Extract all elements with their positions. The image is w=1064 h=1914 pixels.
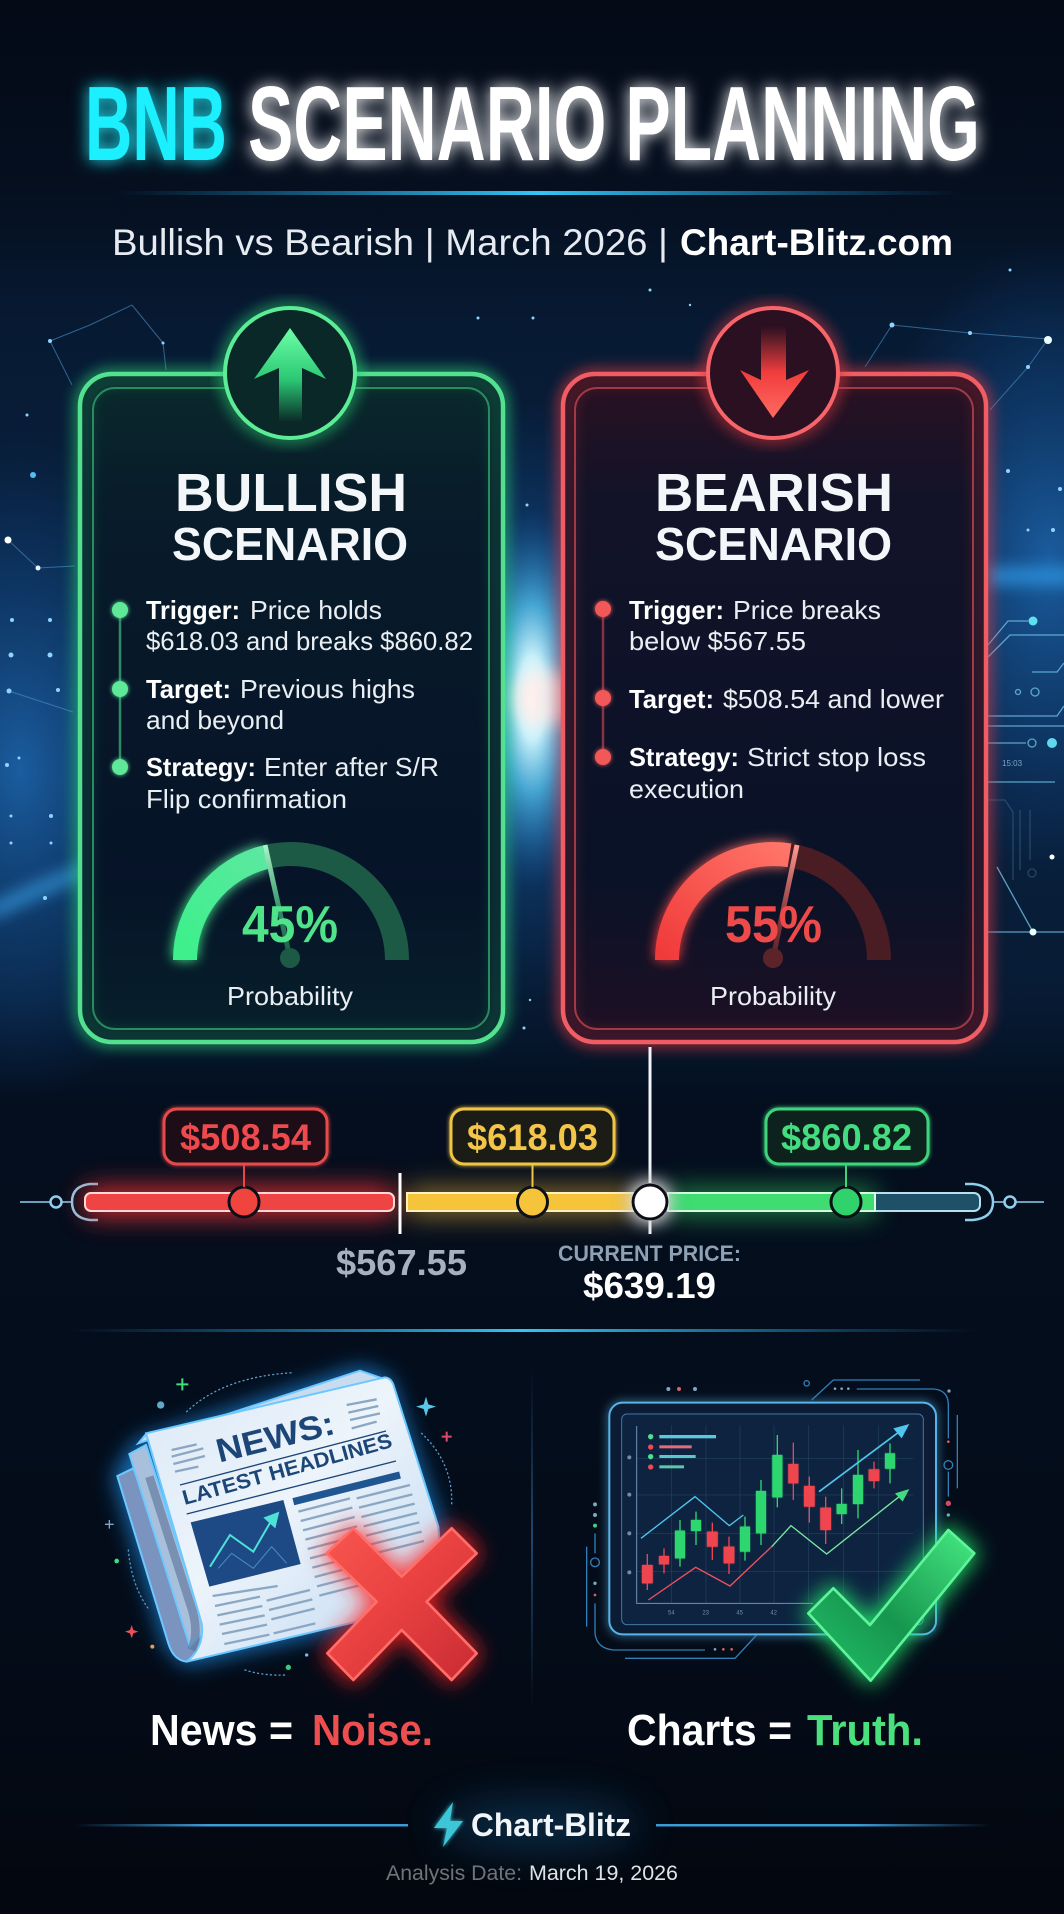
caption: charts = truth <box>627 1706 923 1755</box>
gauge: 55%: 55% <box>725 896 822 954</box>
heading: bearish scenario: SCENARIO <box>655 518 892 570</box>
label: current price: CURRENT PRICE: <box>558 1241 741 1266</box>
analysis date: March 19, 2026 <box>529 1862 678 1885</box>
heading: bearish scenario <box>655 463 893 570</box>
icon: newspaper <box>105 1371 452 1675</box>
panel: bullish scenario <box>80 307 503 1042</box>
icon: red X <box>327 1528 477 1680</box>
bullet list <box>146 595 473 814</box>
icon: candlestick chart: 23 <box>702 1610 710 1616</box>
timeline dots <box>595 601 611 765</box>
panel: bearish scenario <box>563 307 986 1042</box>
analysis date: Analysis Date: <box>386 1862 522 1885</box>
caption: charts = truth: Truth. <box>807 1706 923 1755</box>
title: BNB <box>85 65 227 183</box>
heading: bullish scenario: SCENARIO <box>172 518 408 570</box>
gauge: 45% <box>185 845 397 1011</box>
bullet list <box>629 595 944 804</box>
icon: green check <box>808 1530 974 1681</box>
caption: news = noise: News = <box>150 1706 293 1755</box>
price tag: 508.54: $508.54 <box>180 1117 311 1158</box>
scale end caps <box>20 1184 1044 1220</box>
bullet list: Flip confirmation <box>146 784 347 814</box>
bullet list: Enter after S/R <box>264 752 439 782</box>
price tag: 860.82 <box>766 1109 928 1187</box>
bullet list: Trigger: <box>146 595 240 625</box>
bullet list: Target: <box>146 674 231 704</box>
gauge: 55%: Probability <box>710 981 836 1011</box>
scale markers <box>229 1185 861 1219</box>
caption: charts = truth: Charts = <box>627 1706 792 1755</box>
label: current price <box>558 1241 741 1306</box>
subtitle: Bullish vs Bearish | March 2026 | <box>112 222 668 263</box>
icon: candlestick chart: 54 <box>668 1610 675 1616</box>
label: current price: $639.19 <box>583 1265 716 1306</box>
panel: charts equal truth <box>587 1380 974 1755</box>
gauge: 45%: 45% <box>242 896 338 954</box>
analysis date <box>386 1862 678 1885</box>
bullet list: Price breaks <box>733 595 881 625</box>
bullet list: Price holds <box>250 595 382 625</box>
icon: candlestick chart: 42 <box>770 1610 778 1616</box>
subtitle <box>112 222 953 263</box>
bullet list: Target: <box>629 684 714 714</box>
icon: down arrow badge <box>707 307 839 439</box>
icon: up arrow badge <box>224 307 356 439</box>
caption: news = noise: Noise. <box>312 1706 433 1755</box>
bullet list: Strategy: <box>146 752 256 782</box>
price tag: 618.03 <box>451 1109 614 1187</box>
footer brand: Chart-Blitz <box>471 1807 631 1843</box>
bullet list: Strategy: <box>629 742 739 772</box>
icon: candlestick chart <box>587 1380 957 1658</box>
icon: lightning bolt <box>434 1802 463 1847</box>
icon: newspaper: LATEST HEADLINES <box>180 1429 395 1510</box>
bullet list: execution <box>629 774 744 804</box>
gauge: 55% <box>667 845 879 1011</box>
decorative readout: 15:03 <box>1002 759 1023 768</box>
bullet list: $618.03 and breaks $860.82 <box>146 626 473 656</box>
bullet list: below $567.55 <box>629 626 806 656</box>
timeline dots <box>112 602 128 775</box>
price scale <box>20 1047 1044 1306</box>
bullet list: and beyond <box>146 705 284 735</box>
subtitle: Chart-Blitz.com <box>680 222 953 263</box>
current price marker line <box>648 1047 652 1234</box>
icon: candlestick chart: 45 <box>736 1610 744 1616</box>
heading: bearish scenario: BEARISH <box>655 463 893 523</box>
price tag: 508.54 <box>164 1109 327 1187</box>
caption: news = noise <box>150 1706 433 1755</box>
label: support level: $567.55 <box>336 1242 467 1283</box>
price tag: 618.03: $618.03 <box>467 1117 598 1158</box>
heading: bullish scenario <box>172 463 408 570</box>
bullet list: Previous highs <box>240 674 415 704</box>
footer brand <box>75 1799 990 1851</box>
price tag: 860.82: $860.82 <box>781 1117 912 1158</box>
bullet list: $508.54 and lower <box>723 684 944 714</box>
bullet list: Strict stop loss <box>747 742 926 772</box>
gauge: 45%: Probability <box>227 981 353 1011</box>
bullet list: Trigger: <box>629 595 724 625</box>
heading: bullish scenario: BULLISH <box>175 463 407 523</box>
scale bar segments <box>85 1187 980 1217</box>
panel: news equals noise <box>105 1371 477 1755</box>
icon: newspaper: NEWS: <box>212 1405 338 1470</box>
